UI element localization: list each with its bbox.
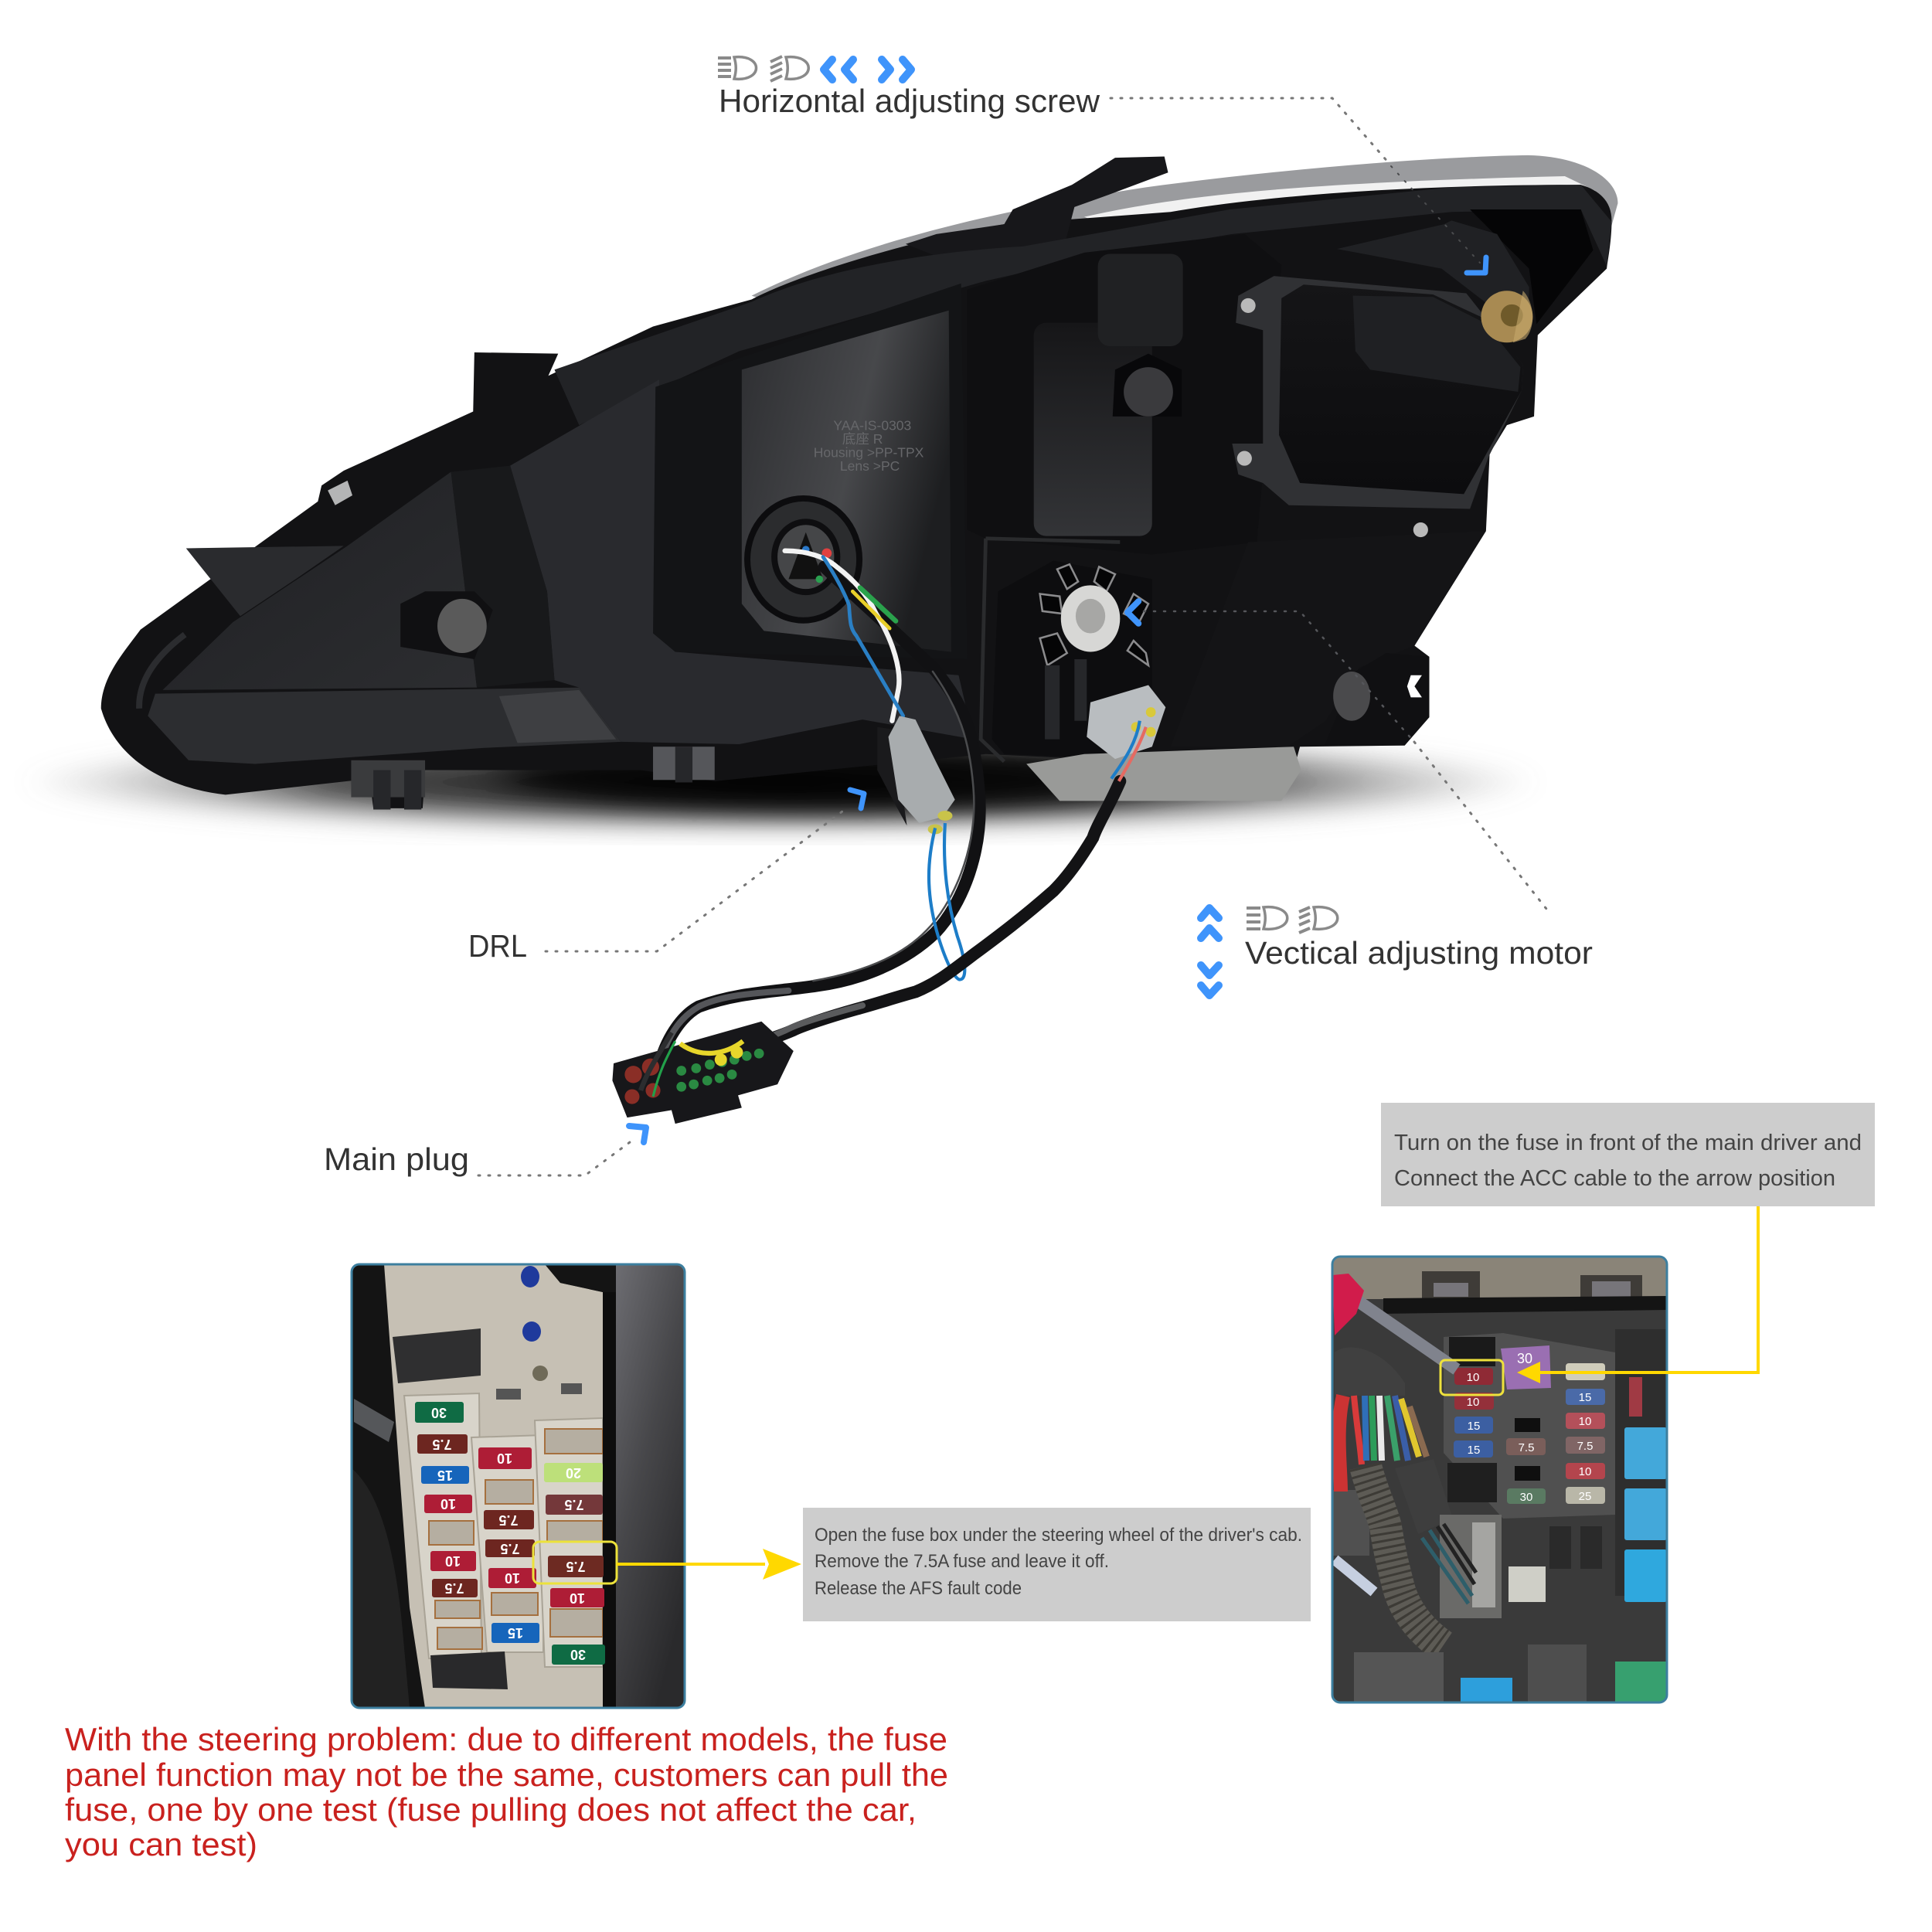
- fuse column left: 15: [437, 1468, 453, 1483]
- clip tab on top: [906, 156, 1168, 261]
- icon: vertical blue down arrows: [1201, 965, 1219, 995]
- red warning note: With the steering problem: due to different models, the fuse: [65, 1721, 947, 1757]
- blue corner marker: DRL: [850, 790, 864, 808]
- probe body: [1354, 1298, 1457, 1369]
- fuse column left: 10: [440, 1496, 456, 1512]
- right column fuses: 10: [1579, 1415, 1591, 1428]
- leader: main plug: [478, 1142, 630, 1175]
- yellow arrow to instruction: [617, 1549, 801, 1580]
- fuse column middle: [478, 1447, 539, 1643]
- icon: vertical blue up arrows: [1201, 908, 1219, 938]
- electrical tape wrap: [1395, 1459, 1453, 1534]
- fuse column right: 7.5: [564, 1497, 584, 1512]
- right column fuses: 15: [1579, 1391, 1591, 1404]
- purple 30A fuse: 30: [1517, 1351, 1532, 1366]
- black tape top: [393, 1328, 481, 1383]
- motor cover box: [1279, 284, 1523, 494]
- adjusting motor housing: [992, 560, 1152, 758]
- right column fuses: 25: [1579, 1490, 1591, 1503]
- central rear panel rim: [653, 284, 968, 659]
- dark top notch: [546, 1266, 603, 1292]
- dark ridge band: [451, 466, 554, 688]
- fuse column left: 30: [431, 1405, 447, 1420]
- fuse column middle: 7.5: [500, 1541, 520, 1556]
- purple 30A fuse: [1501, 1345, 1551, 1389]
- empty fuse slots: [429, 1429, 603, 1649]
- screws on gasket: [1237, 298, 1428, 537]
- callout: ACC cable instruction: Turn on the fuse in front of the main driver and: [1394, 1131, 1862, 1155]
- callout: fuse box instruction: Release the AFS fault code: [815, 1578, 1022, 1599]
- fuse column left: [415, 1402, 478, 1597]
- icon: high beam headlight (motor): [1299, 907, 1338, 933]
- dark tabs: [1549, 1526, 1602, 1569]
- right side block: [1615, 1329, 1667, 1596]
- corrugated conduit: [1366, 1466, 1443, 1646]
- callout: fuse box instruction: Remove the 7.5A fuse and leave it off.: [815, 1551, 1109, 1572]
- black dome boot: [1335, 1347, 1405, 1396]
- fuse column left: 10: [445, 1553, 461, 1569]
- left column fuses: 10: [1467, 1396, 1479, 1409]
- icon: low beam headlight (motor): [1247, 907, 1287, 929]
- dark shapes at lower left: [352, 1468, 410, 1708]
- embossed housing text: Lens >PC: [840, 458, 900, 474]
- wing panel: [510, 379, 974, 744]
- fuse column right: 10: [570, 1590, 585, 1606]
- fuse column right: 7.5: [566, 1559, 586, 1574]
- white clip: [1509, 1566, 1546, 1602]
- dark wire band: [1383, 1296, 1667, 1314]
- photo border: [352, 1264, 685, 1708]
- top engine bay band: [1332, 1257, 1667, 1299]
- leader on lamp: vertical motor: [1144, 611, 1414, 742]
- icon: high beam headlight: [770, 56, 808, 81]
- yellow highlight box: [1440, 1360, 1503, 1395]
- coloured wire bunch: [1339, 1396, 1427, 1492]
- leader: horizontal adjusting screw: [1111, 98, 1389, 164]
- bottom mounting stems: [351, 747, 715, 810]
- photo: engine bay fuse box: [1332, 1257, 1667, 1702]
- yellow highlight box: [533, 1542, 617, 1583]
- callout: fuse box instruction: Open the fuse box under the steering wheel of the driver's cab.: [815, 1525, 1302, 1546]
- top rim band: [554, 185, 1611, 425]
- label: DRL: DRL: [468, 928, 527, 964]
- callout: ACC cable instruction: Connect the ACC cable to the arrow position: [1394, 1166, 1835, 1191]
- headlight assembly photo: [101, 155, 1617, 1124]
- lower bar panel: [148, 688, 621, 764]
- fuse column right: 30: [570, 1647, 586, 1662]
- right rear bracket: [1325, 653, 1430, 746]
- middle column fuses: 7.5: [1519, 1441, 1534, 1454]
- embossed housing text: [814, 417, 924, 474]
- blue arrow at adjusting motor: [1128, 601, 1138, 624]
- white reflection in lens: [1084, 176, 1596, 226]
- upper recess panel: [1034, 323, 1152, 536]
- grey wire connector: [1422, 1515, 1502, 1618]
- bracket cutout: [1407, 675, 1422, 697]
- red warning note: you can test): [65, 1826, 257, 1862]
- right column fuses: 10: [1579, 1465, 1591, 1478]
- fuse block body: [1444, 1333, 1615, 1519]
- callout: fuse box instruction: [803, 1508, 1311, 1621]
- lens strip along top: [752, 155, 1617, 308]
- fuse column left: 7.5: [444, 1580, 464, 1596]
- metal clips: [496, 1383, 582, 1400]
- rear dark connector socket: [877, 727, 906, 825]
- black shield strip: [603, 1417, 604, 1668]
- embossed housing text: Housing >PP-TPX: [814, 445, 924, 461]
- embossed housing text: 底座 R: [842, 431, 883, 447]
- fuse column middle: 15: [508, 1625, 523, 1641]
- leader on lamp: horizontal screw: [1391, 166, 1480, 263]
- red warning note: panel function may not be the same, customers can pull the: [65, 1757, 948, 1793]
- left column fuses: 15: [1468, 1420, 1480, 1433]
- small vertical fuse: [1629, 1377, 1642, 1417]
- raised box: [1098, 253, 1183, 346]
- red warning note: [65, 1721, 948, 1862]
- label: vectical adjusting motor: Vectical adjusting motor: [1245, 935, 1593, 971]
- bottom relay boxes: [1354, 1645, 1667, 1702]
- leader: DRL: [546, 811, 842, 951]
- icon: blue double left arrows: [824, 60, 853, 80]
- yellow arrow to fuse: [1517, 1206, 1758, 1383]
- left lobe rim: [139, 634, 185, 709]
- striped wires lower left: [1335, 1560, 1374, 1592]
- right column fuses: 7.5: [1577, 1440, 1593, 1453]
- bolt mount plate: [1337, 220, 1529, 332]
- left column fuses: [1454, 1368, 1494, 1458]
- label: main plug: Main plug: [324, 1141, 469, 1177]
- left lobe panel: [162, 472, 477, 690]
- blue relays: [1624, 1427, 1667, 1602]
- black tape bottom: [430, 1651, 508, 1689]
- small white clip: [328, 481, 352, 505]
- wiring grommet: [744, 495, 862, 624]
- blue corner marker: main plug: [629, 1126, 646, 1142]
- blue corner marker: horizontal screw: [1467, 257, 1486, 273]
- beige fuse panel: [384, 1264, 603, 1708]
- fuse column left: 7.5: [432, 1437, 452, 1452]
- red warning note: fuse, one by one test (fuse pulling does not affect the car,: [65, 1791, 917, 1828]
- cover gasket frame: [1232, 276, 1523, 509]
- black recess above fuses: [1449, 1337, 1495, 1366]
- left column fuses: 15: [1468, 1444, 1480, 1457]
- silver base plate: [1026, 747, 1301, 801]
- brass mounting bolt: [1481, 291, 1532, 342]
- ground shadow under headlight: [19, 730, 1542, 835]
- photo: cabin fuse panel: [352, 1264, 685, 1708]
- thin wires from grommet: [659, 551, 980, 1066]
- black recess under block: [1447, 1463, 1497, 1502]
- fuse column right: 20: [566, 1465, 581, 1481]
- fuse column right: [544, 1463, 605, 1665]
- deep black pocket at bolt: [1470, 209, 1594, 324]
- light patch on lower bar: [499, 690, 616, 743]
- screw post at left: [400, 591, 493, 659]
- photo border: [1332, 1257, 1667, 1702]
- black wire to motor connector: [754, 781, 1120, 1043]
- grey plastic cover: [616, 1264, 685, 1708]
- blue DRL wire loop: [929, 823, 964, 980]
- hole: [532, 1366, 548, 1381]
- right column fuses: [1566, 1363, 1605, 1504]
- middle column fuses: [1506, 1438, 1546, 1504]
- bolt left: [354, 1399, 394, 1442]
- housing silhouette: [101, 185, 1611, 808]
- rubber plug knob: [1113, 354, 1182, 417]
- embossed housing text: YAA-IS-0303: [833, 417, 911, 433]
- callout: ACC cable instruction: [1381, 1103, 1875, 1206]
- label: horizontal adjusting screw: Horizontal adjusting screw: [719, 83, 1100, 119]
- icon: blue double right arrows: [882, 60, 911, 80]
- lower right wedge: [1171, 531, 1486, 747]
- dark hood connectors: [1422, 1271, 1642, 1299]
- empty fuse slots: [1515, 1418, 1540, 1481]
- grey left lower area: [1332, 1490, 1369, 1556]
- fuse column middle: 10: [505, 1570, 520, 1586]
- motor fan spokes: [1040, 564, 1148, 665]
- leader: vertical adjusting motor: [1414, 742, 1546, 909]
- grey motor connector: [1087, 685, 1165, 759]
- motor base ribs: [1045, 659, 1087, 740]
- left column fuses: 10: [1467, 1371, 1479, 1384]
- cover top face highlight: [1353, 296, 1520, 392]
- central rear panel: [742, 311, 951, 651]
- main wiring plug: [612, 1022, 794, 1124]
- right dark block: [968, 234, 1281, 554]
- fuse column middle: 10: [497, 1451, 512, 1466]
- icon: low beam headlight: [718, 57, 756, 79]
- fuse column middle: 7.5: [498, 1512, 519, 1528]
- fuse column frames: [404, 1393, 603, 1667]
- middle column fuses: 30: [1520, 1491, 1532, 1504]
- motor connector wires: [1111, 721, 1146, 781]
- blue screws: [521, 1266, 541, 1342]
- red probe cap: [1332, 1274, 1364, 1335]
- left triangle bracket: [186, 546, 344, 616]
- motor frame edges: [981, 539, 1120, 761]
- motor hub silver: [1061, 585, 1120, 651]
- grey DRL connector: [889, 716, 955, 834]
